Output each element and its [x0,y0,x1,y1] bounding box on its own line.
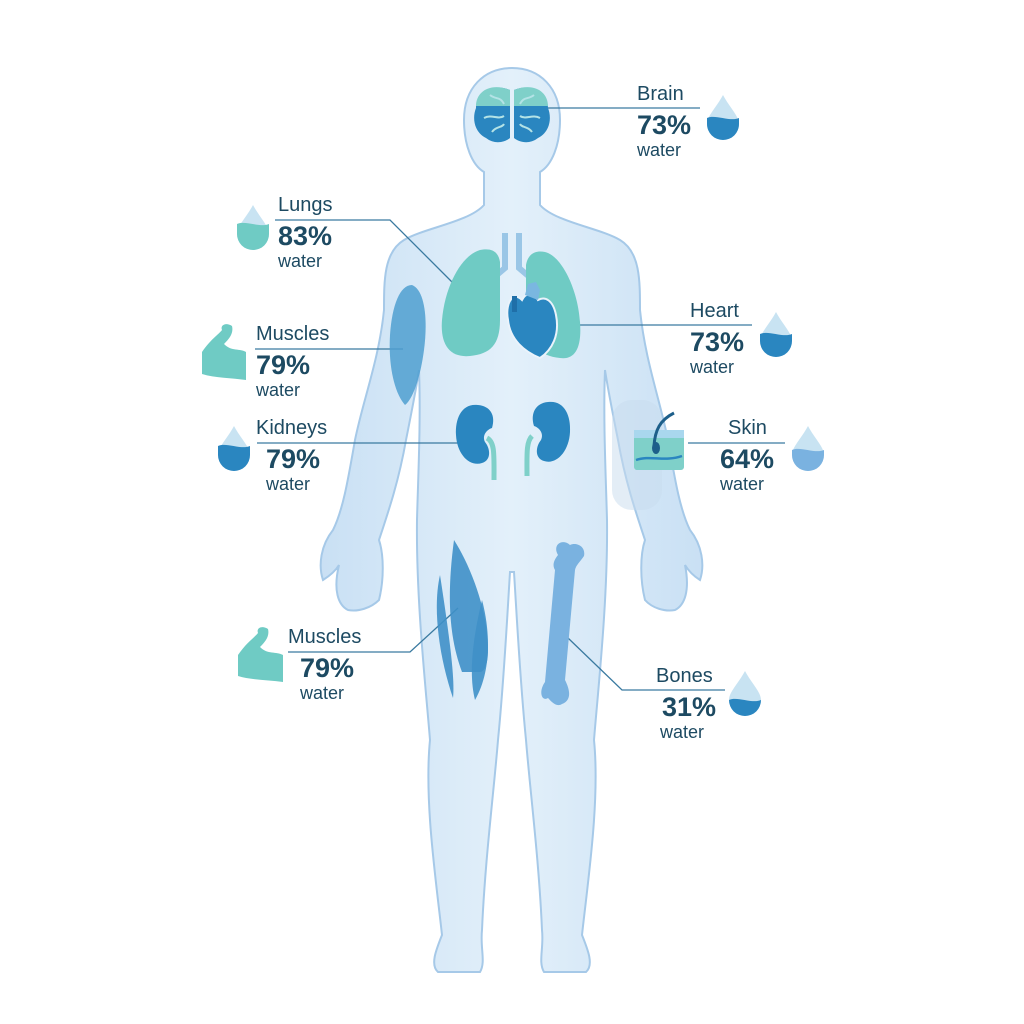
body silhouette [321,68,702,972]
label: heart: Heart [690,300,739,322]
drop kidneys [218,426,250,471]
label: brain [637,83,691,160]
drop heart [760,312,792,357]
skin dotted patch [612,400,662,510]
label: lungs: water [278,251,322,271]
label: lungs: 83% [278,221,332,251]
label: muscles leg [288,626,361,703]
label: kidneys: 79% [266,444,320,474]
drop lungs [237,205,269,250]
label: muscles leg: 79% [300,653,354,683]
label: brain: 73% [637,110,691,140]
skin icon [634,413,684,470]
label: skin [720,417,774,494]
label: kidneys: water [266,474,310,494]
label: heart: 73% [690,327,744,357]
label: muscles leg: water [300,683,344,703]
label: lungs [278,194,332,271]
icon: flexed arm 2 [238,627,283,682]
bone [541,542,584,705]
label: lungs: Lungs [278,194,332,216]
label: bones: water [660,722,704,742]
label: bones: Bones [656,665,713,687]
leader lines [255,108,785,690]
icon: flexed arm 1 [202,324,246,380]
label: heart: water [690,357,734,377]
label: skin: water [720,474,764,494]
brain [474,87,550,142]
label: muscles arm: 79% [256,350,310,380]
kidneys [456,402,570,480]
heart [507,282,557,358]
label: skin: 64% [720,444,774,474]
label: muscles arm: Muscles [256,323,329,345]
drop brain [707,95,739,140]
label: muscles leg: Muscles [288,626,361,648]
label: brain: water [637,140,681,160]
label: brain: Brain [637,83,684,105]
label: muscles arm [256,323,329,400]
label: kidneys: Kidneys [256,417,327,439]
drop skin [792,426,824,471]
label: skin: Skin [728,417,767,439]
arm muscle [390,285,426,405]
label: kidneys [256,417,327,494]
drop bones [729,671,761,716]
label: heart [690,300,744,377]
label: bones: 31% [662,692,716,722]
label: bones [656,665,716,742]
label: muscles arm: water [256,380,300,400]
lungs [442,233,580,358]
leg muscle [437,540,488,700]
